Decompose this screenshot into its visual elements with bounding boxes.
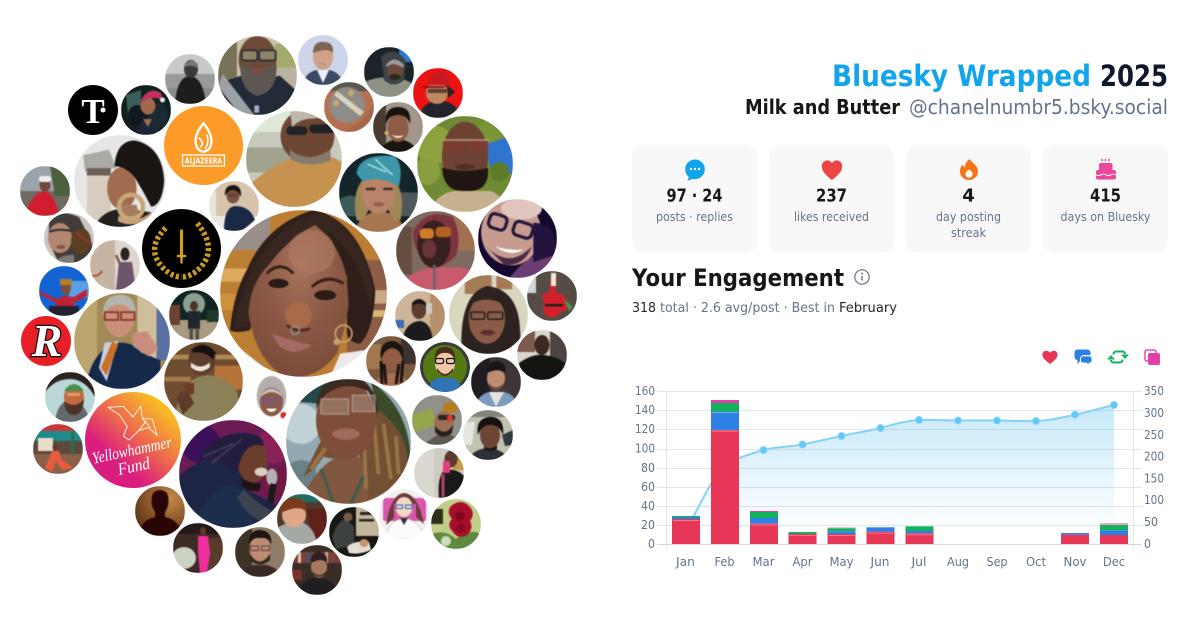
right axis labels: 50 [1144, 515, 1158, 529]
left axis labels: 60 [641, 480, 655, 494]
avatar: woman with curly hair and glasses [449, 275, 528, 354]
avatar: woman in profile with hoop earring [74, 135, 166, 227]
stat card: day posting streak: streak [951, 225, 987, 240]
avatar: woman with bandana [339, 153, 418, 232]
icon: cake [1096, 159, 1116, 180]
avatar: man with red-eye filter [412, 395, 462, 445]
right axis labels: 250 [1144, 428, 1164, 442]
avatar: performer with dreadlocks and microphone [179, 420, 287, 528]
stat card: days on Bluesky [1043, 145, 1168, 253]
right axis labels: 200 [1144, 450, 1164, 464]
left axis labels: 100 [635, 442, 655, 456]
avatar: older man in suit pointing [74, 293, 170, 389]
avatar: woman in orange dress [33, 424, 83, 474]
month labels: Jun [869, 555, 890, 569]
month labels: Mar [752, 555, 775, 569]
month labels: Sep [986, 555, 1008, 569]
month labels: May [830, 555, 854, 569]
stat card: posts and replies: 97 · 24 [666, 186, 722, 206]
month labels [675, 555, 1125, 569]
bar: April [788, 532, 816, 544]
avatar: smiling woman [373, 102, 423, 152]
avatar: R logo [21, 316, 71, 366]
stat card: likes received: 237 [816, 186, 847, 206]
icon: flame [960, 159, 978, 180]
month labels: Apr [792, 555, 813, 569]
stat card: day posting streak: day posting [936, 209, 1001, 224]
avatar: Yellowhammer Fund logo [85, 392, 181, 488]
avatar: man in olive jacket with drink [164, 342, 243, 421]
month labels: Jul [910, 555, 926, 569]
avatar: anime woman with long hair [379, 489, 429, 539]
title: 2025 [1100, 59, 1168, 93]
stat card: likes received: likes received [794, 209, 869, 224]
right axis labels: 100 [1144, 493, 1164, 507]
avatar: main profile photo of woman [220, 210, 387, 377]
avatar: memoji grandma [256, 376, 287, 420]
month labels: Aug [947, 555, 969, 569]
avatar: man in front of bookshelf [292, 545, 342, 595]
stat card: day posting streak [906, 145, 1031, 253]
avatar: bearded man in car [218, 36, 297, 115]
month labels: Nov [1064, 555, 1086, 569]
avatar: New York Times logo [68, 85, 118, 135]
chart legend icons [1042, 350, 1160, 366]
avatar: standing woman [90, 240, 140, 290]
title: Bluesky Wrapped [832, 59, 1091, 93]
engagement summary text: total · 2.6 avg/post · Best in [660, 300, 835, 316]
avatar: person in red hoodie with orange glasses [396, 211, 475, 290]
bar: May [828, 527, 856, 544]
chart grid and axes [657, 391, 1142, 549]
avatar: man with glasses and beard [235, 527, 285, 577]
avatar: man taking mirror selfie [395, 291, 445, 341]
avatar bubble cloud [20, 35, 577, 595]
avatar: man in suit [298, 35, 348, 85]
avatar: Al Jazeera logo: ALJAZEERA [185, 157, 223, 166]
icon: heart [822, 160, 842, 180]
right axis labels: 350 [1144, 384, 1164, 398]
avatar: man in hoodie [364, 47, 414, 97]
icon: quotes legend [1145, 350, 1160, 365]
left axis labels: 0 [648, 537, 655, 551]
bar: March [750, 511, 778, 544]
user name and handle [745, 95, 1168, 119]
icon: reposts legend [1107, 352, 1129, 362]
bar: February [711, 400, 739, 544]
user name and handle: Milk and Butter [745, 95, 900, 119]
avatar: gold wreath and sword [142, 209, 221, 288]
bar: July [906, 526, 934, 544]
stat card: days on Bluesky: days on Bluesky [1060, 209, 1151, 224]
avatar: silhouette placeholder [135, 486, 185, 536]
avatar: man in red jacket outdoors [20, 166, 70, 216]
stat card: day posting streak: 4 [962, 186, 975, 206]
avatar: toddler [277, 494, 327, 544]
avatar: young man in dark blue [471, 357, 521, 407]
right axis labels: 0 [1144, 537, 1151, 551]
left axis labels: 120 [635, 422, 655, 436]
left axis labels: 80 [641, 461, 655, 475]
month labels: Feb [714, 555, 734, 569]
avatar: Yellowhammer Fund logo: Fund [115, 454, 152, 479]
stat card: likes received [769, 145, 894, 253]
left axis labels: 20 [641, 518, 655, 532]
left axis labels [635, 384, 655, 551]
icon: replies legend [1074, 350, 1092, 366]
icon: chat bubble [685, 160, 705, 181]
avatar: man with green hat [45, 372, 95, 422]
stacked bars [672, 400, 1128, 544]
cumulative line points [760, 402, 1118, 454]
avatar: Al Jazeera logo [164, 106, 243, 185]
avatar: man with sunglasses and leaves [417, 116, 513, 212]
avatar: young man in car [463, 410, 513, 460]
avatar: man with glasses in purple light [478, 199, 557, 278]
user name and handle: @chanelnumbr5.bsky.social [909, 95, 1168, 119]
bar: November [1061, 533, 1089, 544]
avatar: man with braids selfie [366, 336, 416, 386]
avatar: person with glasses and dog [44, 213, 94, 263]
avatar: man at night street [169, 290, 219, 340]
avatar: R logo: R [31, 316, 62, 366]
avatar: man with mustard shirt [246, 111, 342, 207]
avatar: woman with pink phone [414, 448, 464, 498]
avatar: cartoon man with glasses [420, 342, 470, 392]
avatar: anime red cap [413, 68, 463, 118]
month labels: Jan [675, 555, 695, 569]
avatar: inflatable santa goose [527, 271, 577, 321]
right axis labels: 150 [1144, 472, 1164, 486]
stat card: posts and replies [632, 145, 757, 253]
avatar: metal plate on hand [324, 82, 374, 132]
bar: January [672, 516, 700, 544]
stat card: posts and replies: posts · replies [656, 209, 733, 224]
icon: likes legend [1042, 351, 1058, 364]
avatar: barber with child [329, 507, 379, 557]
right axis labels: 300 [1144, 406, 1164, 420]
bar: June [866, 527, 894, 544]
avatar: woman in pink dress at shop [173, 523, 223, 573]
left axis labels: 140 [635, 403, 655, 417]
left axis labels: 40 [641, 499, 655, 513]
cumulative area [686, 405, 1114, 544]
avatar: dark man in sweater [517, 330, 567, 380]
avatar: woman with blazer at desk [209, 181, 259, 231]
avatar: red rose [431, 499, 481, 549]
heading: your engagement: Your Engagement [631, 264, 844, 292]
cumulative line [686, 405, 1114, 531]
bar: December [1100, 523, 1128, 544]
avatar: woman on stage in blue [39, 266, 89, 316]
avatar: woman with locs and glasses [286, 379, 411, 504]
engagement chart [635, 384, 1164, 569]
avatar: New York Times logo: T [81, 92, 105, 131]
month labels: Oct [1026, 555, 1046, 569]
icon: info [855, 270, 869, 284]
left axis labels: 160 [635, 384, 655, 398]
right axis labels [1144, 384, 1164, 551]
avatar: woman in santa hat [121, 85, 171, 135]
engagement summary text: 318 [632, 300, 656, 316]
engagement summary text: February [839, 300, 897, 316]
month labels: Dec [1103, 555, 1125, 569]
avatar: black and white man [165, 54, 215, 104]
stat card: days on Bluesky: 415 [1090, 186, 1121, 206]
